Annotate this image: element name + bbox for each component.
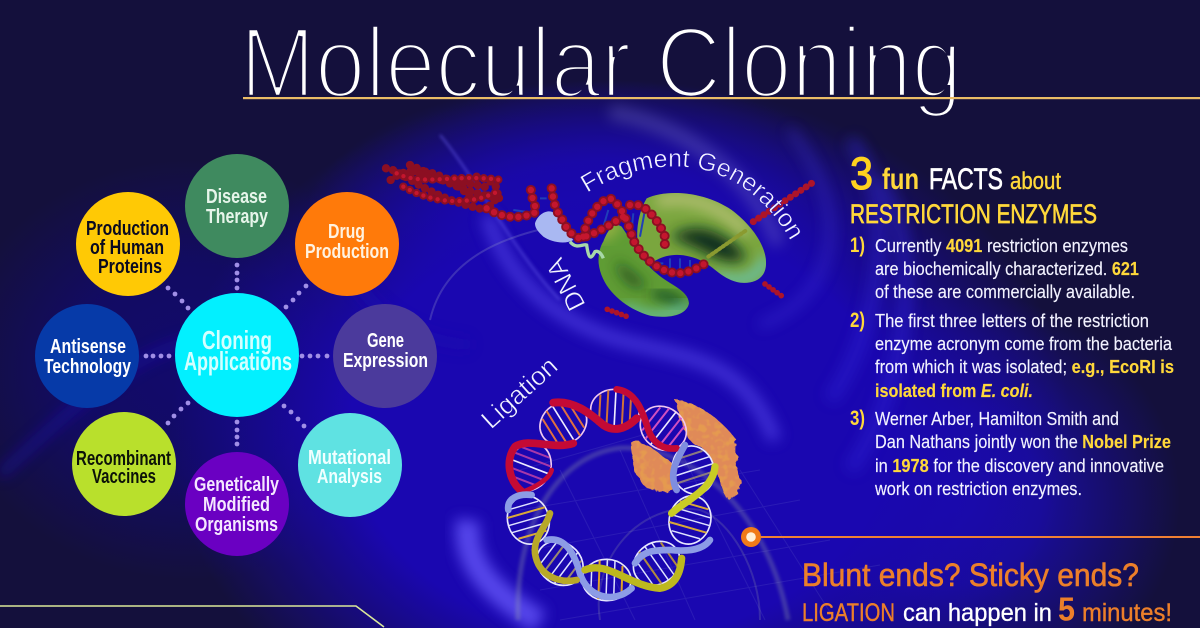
- node: Disease Therapy: Therapy: [206, 206, 269, 228]
- facts heading: 3: [850, 148, 873, 199]
- panel: 3 fun facts about restriction enzymes: [850, 148, 1174, 499]
- enzyme: green upper lobe: [637, 193, 766, 283]
- fact 3: work on restriction enzymes.: [874, 478, 1082, 499]
- callout: blunt ends, sticky ends, ligation: LIGATION: [802, 599, 895, 627]
- panel: cloning applications diagram: [35, 154, 437, 556]
- fact 3: 3): [850, 407, 865, 430]
- callout: blunt ends, sticky ends, ligation: Blunt ends? Sticky ends?: [802, 557, 1139, 593]
- illustration: restriction enzyme cutting DNA: [386, 165, 817, 323]
- node: Genetically Modified Organisms: Genetically: [194, 474, 280, 496]
- facts heading: FACTS: [929, 163, 1003, 196]
- red DNA highlights: [397, 173, 705, 273]
- fact 2: from which it was isolated; e.g., EcoRI is: [875, 356, 1174, 377]
- title: Molecular Cloning: [240, 7, 962, 119]
- fact 1: Currently 4091 restriction enzymes: [875, 235, 1128, 256]
- fact 3: [850, 407, 1171, 499]
- fact 1: are biochemically characterized. 621: [875, 258, 1139, 279]
- fact 2: isolated from E. coli.: [875, 380, 1033, 401]
- node: Genetically Modified Organisms: Organisms: [195, 514, 278, 536]
- fact 3: in 1978 for the discovery and innovative: [875, 455, 1164, 476]
- title underline: [243, 97, 1200, 99]
- facts heading: fun: [882, 163, 919, 196]
- node: Genetically Modified Organisms: Modified: [203, 494, 270, 516]
- hub: Cloning Applications: [175, 293, 299, 417]
- fact 1: [850, 234, 1139, 302]
- illustration: circular DNA with ligase: [502, 388, 742, 601]
- node: Recombinant Vaccines: [72, 412, 176, 516]
- node: Drug Production: Production: [305, 241, 389, 263]
- node: Gene Expression: [333, 304, 437, 408]
- node: Gene Expression: Expression: [343, 350, 428, 372]
- fact 2: 2): [850, 309, 865, 332]
- node: Drug Production: [295, 192, 399, 296]
- node: Antisense Technology: [35, 304, 139, 408]
- callout connector: [741, 527, 1200, 547]
- label: Ligation: Ligation: [475, 351, 563, 434]
- red ribbon: [509, 389, 677, 493]
- node: Disease Therapy: Disease: [206, 186, 267, 208]
- cut DNA fragments: [607, 180, 817, 317]
- node: Mutational Analysis: [298, 413, 402, 517]
- node: Drug Production: Drug: [328, 221, 365, 243]
- callout: blunt ends, sticky ends, ligation: [802, 557, 1172, 628]
- hub: Cloning Applications: Cloning: [202, 325, 272, 355]
- hub: Cloning Applications: Applications: [184, 346, 292, 376]
- facts heading: about: [1010, 168, 1061, 195]
- ligase protein: [630, 400, 742, 499]
- green DNA strand: [708, 230, 747, 257]
- node: Recombinant Vaccines: Recombinant: [76, 448, 171, 470]
- node: Mutational Analysis: Analysis: [317, 466, 382, 488]
- callout: blunt ends, sticky ends, ligation: can happen in: [903, 599, 1052, 627]
- node: Recombinant Vaccines: Vaccines: [92, 466, 156, 488]
- fact 3: Dan Nathans jointly won the Nobel Prize: [875, 431, 1171, 452]
- node: Production of Human Proteins: Production: [86, 218, 169, 240]
- enzyme: green lower lobe: [598, 225, 689, 317]
- node: Antisense Technology: Antisense: [50, 336, 126, 358]
- fact 1: 1): [850, 234, 865, 257]
- blue and yellow ribbon: [508, 445, 715, 597]
- red DNA strands: [487, 185, 705, 273]
- node: Production of Human Proteins: Proteins: [98, 256, 162, 278]
- red DNA coil: [386, 165, 501, 209]
- bottom-left accent line: [0, 606, 384, 627]
- base pair rungs: [513, 198, 690, 270]
- fact 1: of these are commercially available.: [875, 281, 1135, 302]
- node: Antisense Technology: Technology: [44, 356, 132, 378]
- node: Genetically Modified Organisms: [185, 452, 289, 556]
- node: Production of Human Proteins: [76, 192, 180, 296]
- fact 3: Werner Arber, Hamilton Smith and: [875, 408, 1119, 429]
- node: Mutational Analysis: Mutational: [308, 447, 391, 469]
- linker: [570, 242, 603, 258]
- fact 2: The first three letters of the restriction: [875, 310, 1149, 331]
- callout: blunt ends, sticky ends, ligation: 5: [1058, 590, 1075, 628]
- node: Disease Therapy: [185, 154, 289, 258]
- fact 2: [850, 309, 1174, 401]
- node: Production of Human Proteins: of Human: [90, 237, 164, 259]
- connector dots: [144, 263, 329, 446]
- DNA ring lobes: [502, 388, 720, 601]
- node: Gene Expression: Gene: [367, 330, 404, 352]
- callout: blunt ends, sticky ends, ligation: minutes!: [1082, 599, 1172, 627]
- enzyme: pale blue domain: [535, 211, 573, 242]
- facts heading: RESTRICTION ENZYMES: [850, 199, 1097, 229]
- facts heading: [850, 148, 1097, 229]
- label: Fragment Generation: Fragment Generation: [580, 150, 800, 240]
- label: DNA: DNA: [539, 253, 591, 316]
